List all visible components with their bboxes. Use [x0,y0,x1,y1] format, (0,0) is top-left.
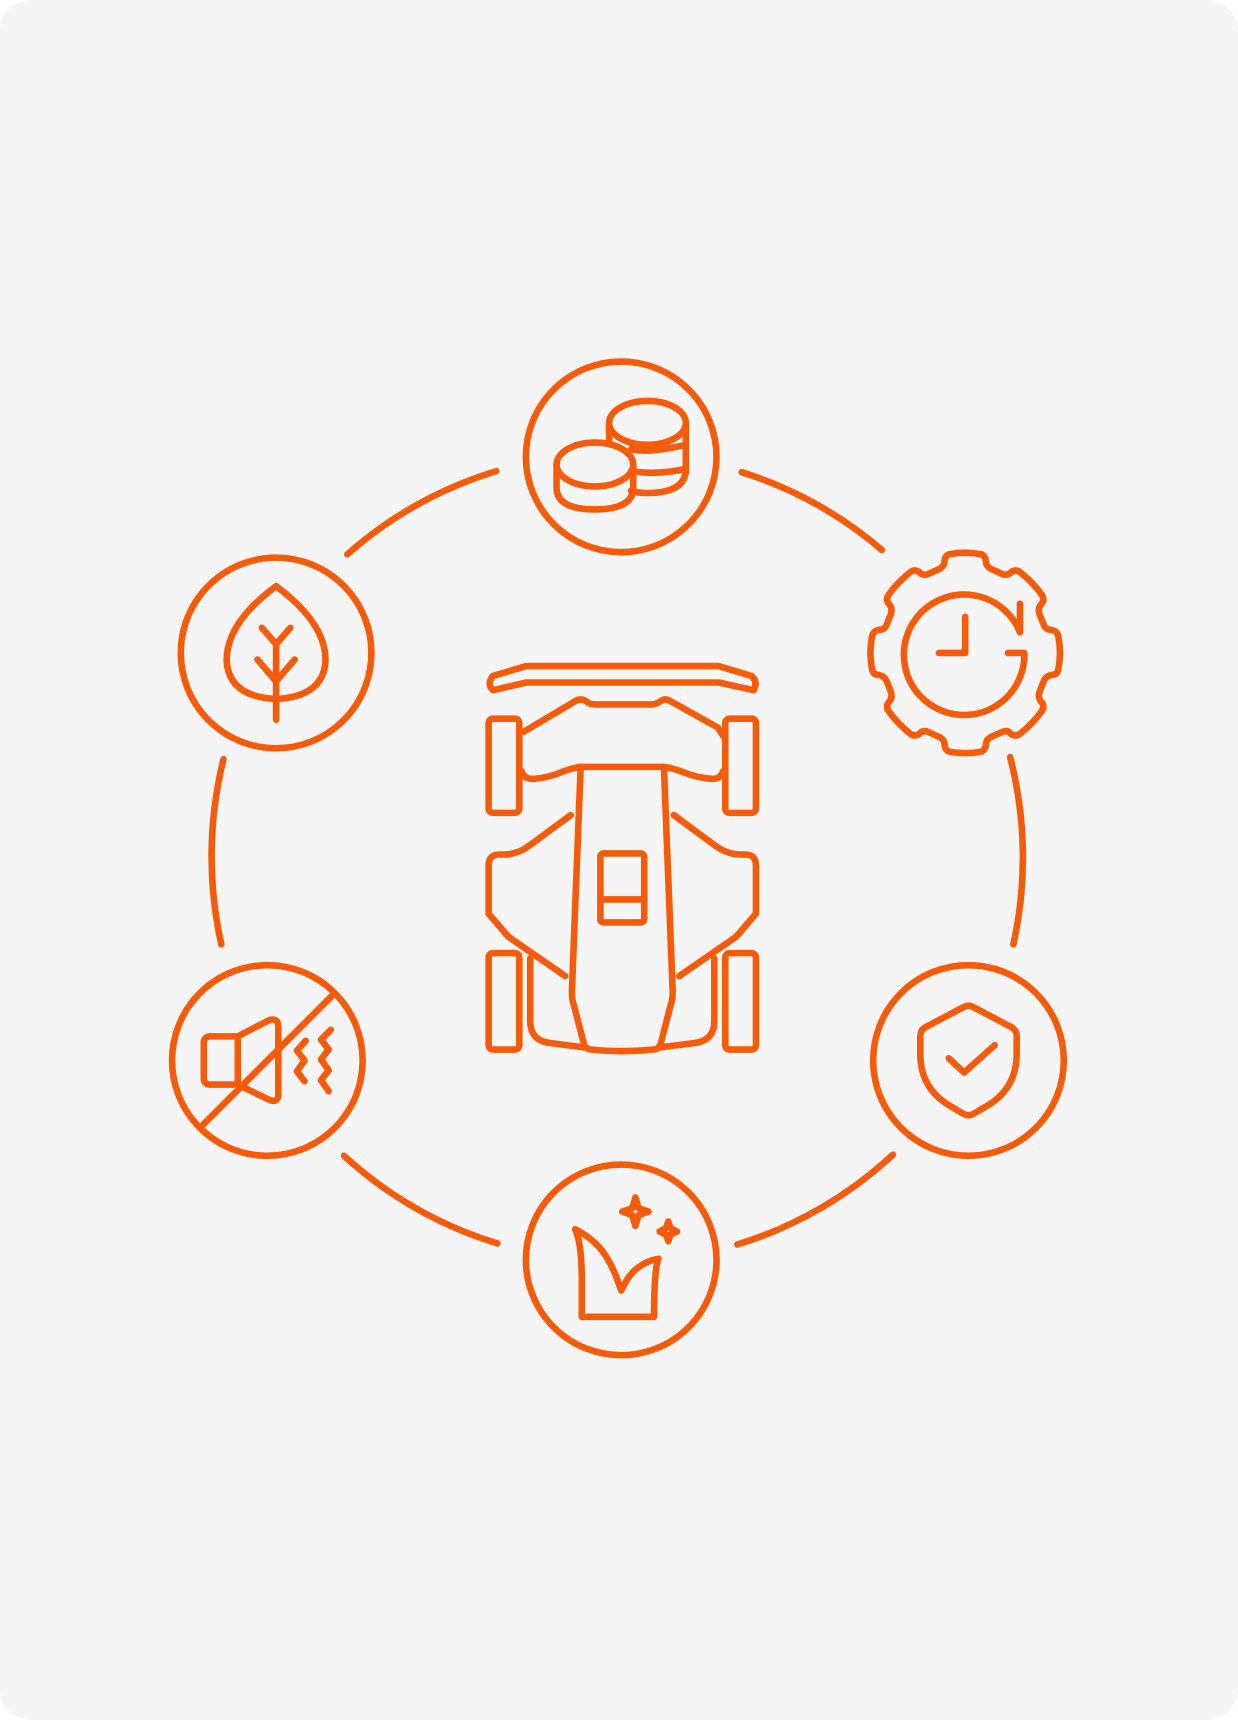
icon: robot mower (center) [489,666,756,1051]
icon: gear clock [870,553,1060,753]
icon: shield check [873,965,1064,1156]
ring arcs [212,471,1023,1245]
icon: coins [526,362,717,552]
icon: no noise [172,965,363,1156]
icon: leaf [181,558,371,748]
icon: grass sparkle [526,1165,717,1355]
